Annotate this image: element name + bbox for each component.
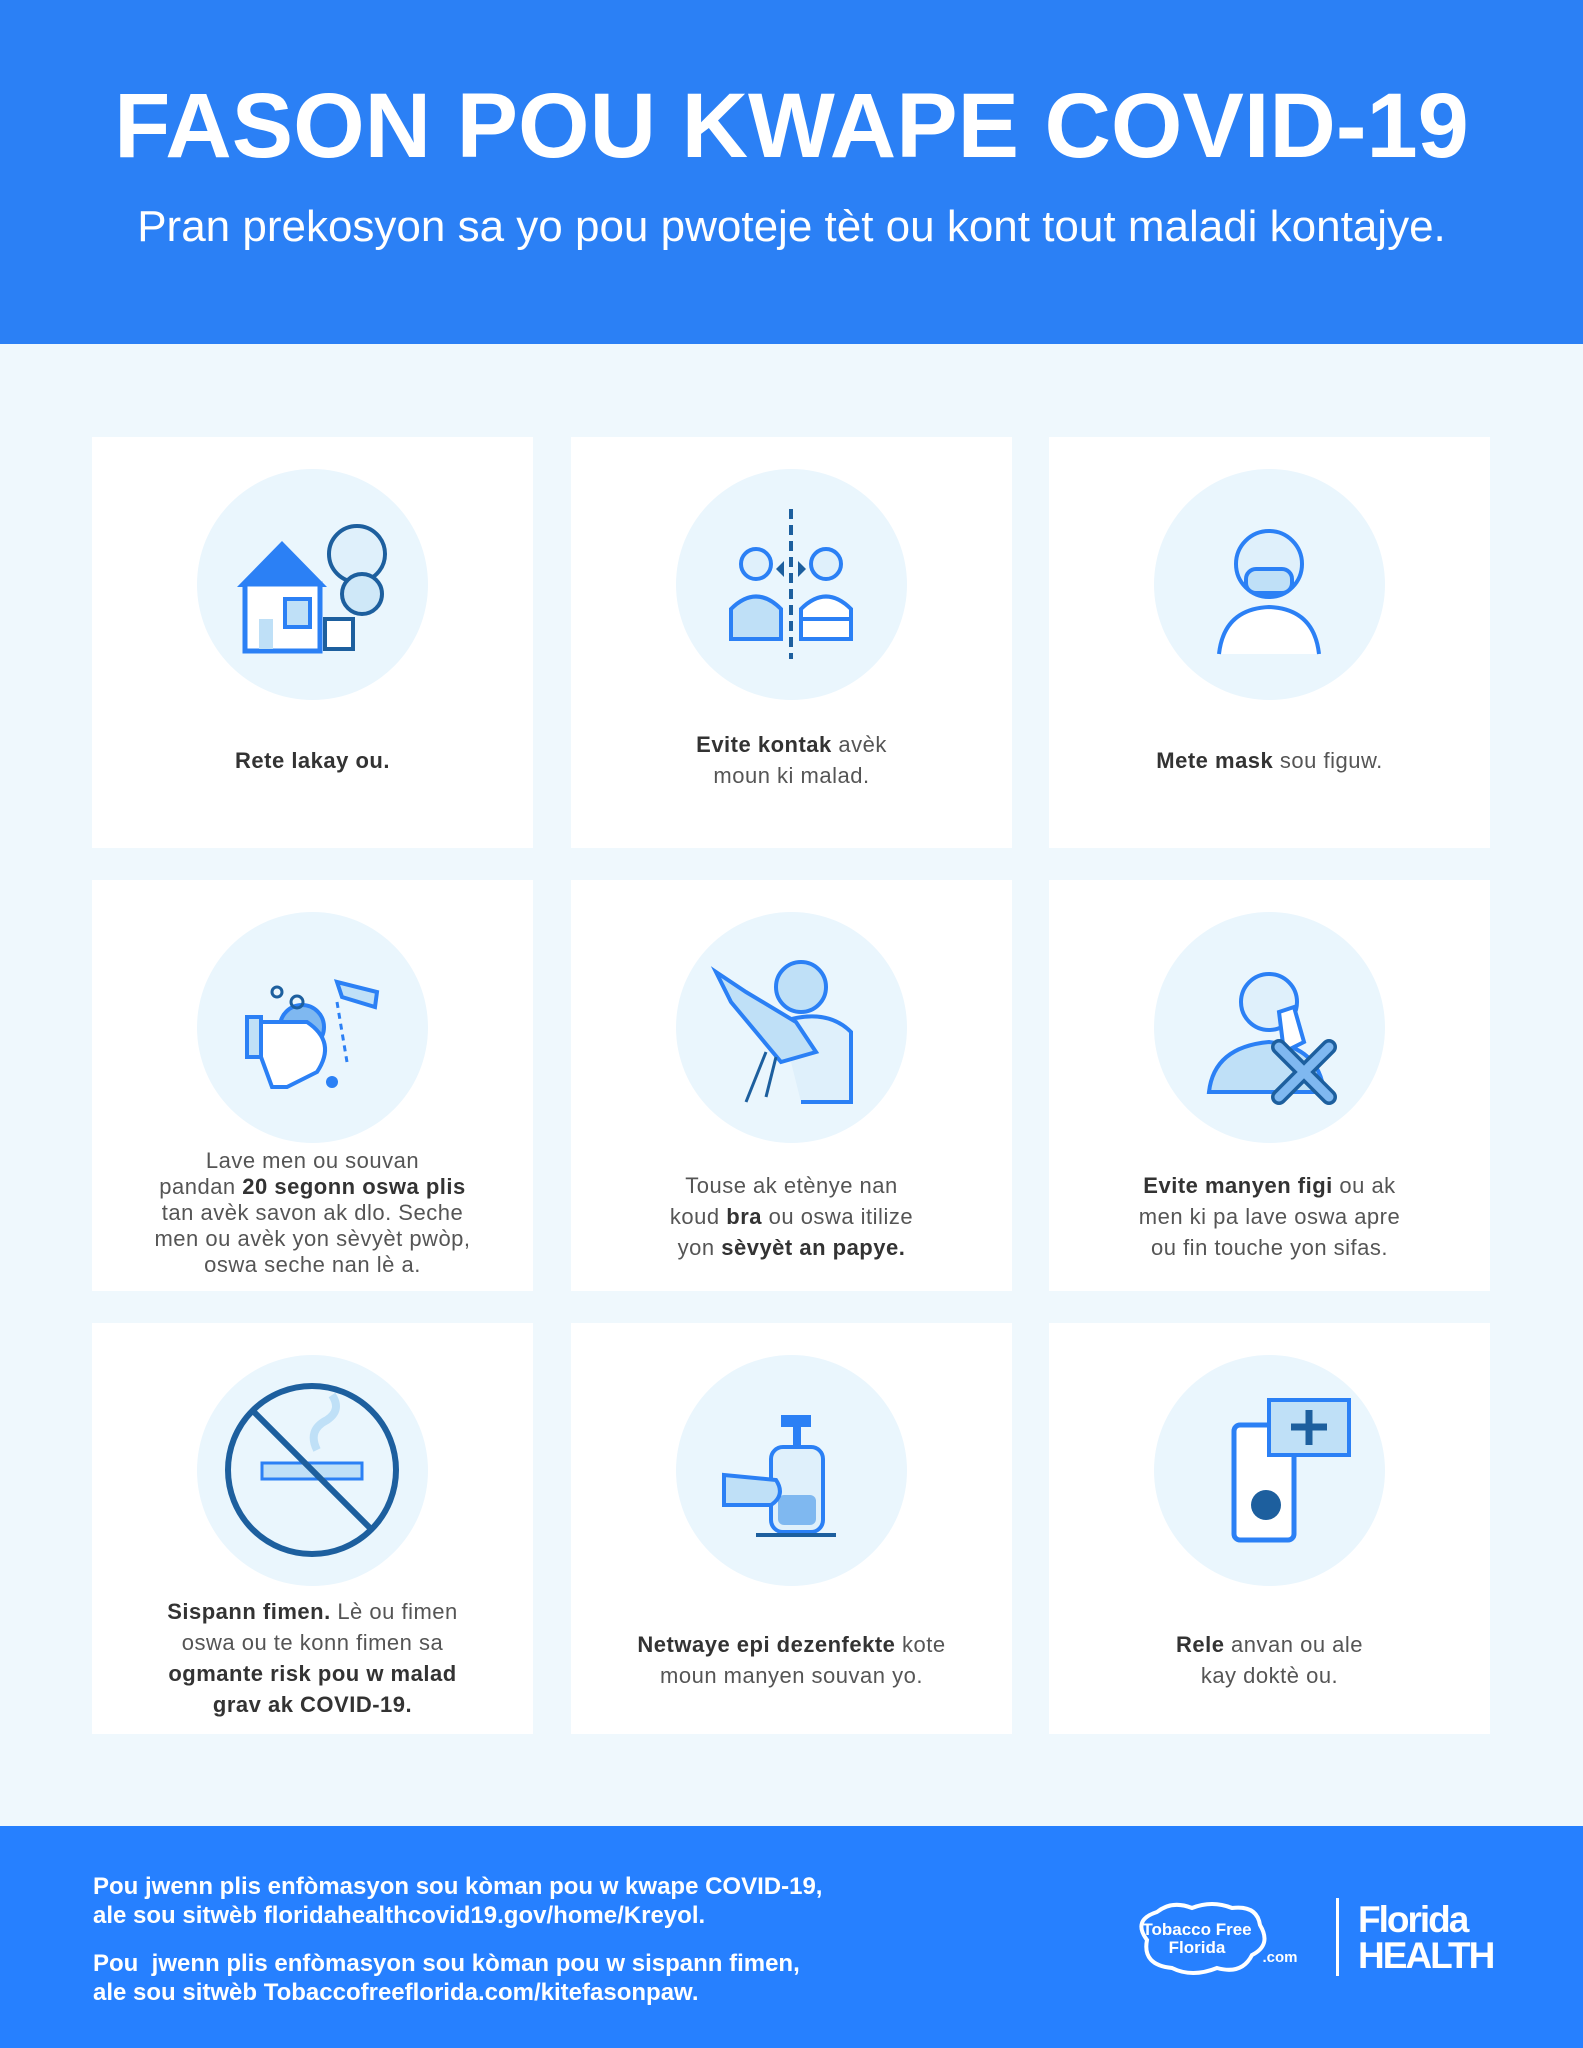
title: FASON POU KWAPE COVID-19 (114, 75, 1469, 177)
icon: distancing (676, 469, 907, 700)
footer (0, 1826, 1583, 2048)
text: tan avèk savon ak dlo. Seche (162, 1200, 463, 1225)
icon: hand washing (197, 912, 428, 1143)
text (154, 1148, 471, 1277)
footer text: covid info: Pou jwenn plis enfòmasyon sou kòman pou w kwape COVID-19, (93, 1873, 822, 1900)
panel: disinfect (571, 1323, 1012, 1734)
footer text: smoking info (93, 1950, 800, 2006)
text: Rele anvan ou ale (1176, 1632, 1363, 1657)
text (1139, 1173, 1400, 1260)
text (637, 1632, 946, 1688)
icon: masked person (1154, 469, 1385, 700)
text: Sispann fimen. Lè ou fimen (167, 1599, 458, 1624)
logo: Florida Health: HEALTH (1358, 1935, 1493, 1976)
footer text: smoking info: Pou jwenn plis enfòmasyon sou kòman pou w sispann fimen, (93, 1950, 800, 1977)
header (0, 0, 1583, 344)
panel: stay home (92, 437, 533, 848)
footer text: covid info: ale sou sitwèb floridahealthcovid19.gov/home/Kreyol. (93, 1902, 705, 1929)
text: Evite manyen figi ou ak (1143, 1173, 1396, 1198)
footer text: covid info (93, 1873, 822, 1929)
icon: cough into elbow (676, 912, 907, 1143)
text: ogmante risk pou w malad (168, 1661, 457, 1686)
logo: Tobacco Free Florida: Florida (1169, 1938, 1226, 1957)
text (167, 1599, 458, 1717)
panel: quit smoking (92, 1323, 533, 1734)
text (670, 1173, 913, 1260)
icon: face touch with X (1154, 912, 1385, 1143)
text: moun ki malad. (713, 763, 870, 788)
text: moun manyen souvan yo. (660, 1663, 923, 1688)
panel: don't touch face (1049, 880, 1490, 1291)
text: koud bra ou oswa itilize (670, 1204, 913, 1229)
text: Touse ak etènye nan (685, 1173, 898, 1198)
icon: sanitizer (676, 1355, 907, 1586)
text: yon sèvyèt an papye. (678, 1235, 905, 1260)
text: Mete mask sou figuw. (1156, 748, 1383, 773)
logo: Florida Health: Florida (1358, 1899, 1467, 1940)
logo: Florida Health (1358, 1899, 1493, 1976)
text: oswa seche nan lè a. (204, 1252, 421, 1277)
subtitle: Pran prekosyon sa yo pou pwoteje tèt ou kont tout maladi kontajye. (137, 202, 1446, 251)
text: Netwaye epi dezenfekte kote (637, 1632, 946, 1657)
text: ou fin touche yon sifas. (1151, 1235, 1388, 1260)
icon: no smoking (197, 1355, 428, 1586)
panel: mask (1049, 437, 1490, 848)
logo: Tobacco Free Florida (1139, 1902, 1298, 1975)
text (696, 732, 887, 788)
text: Rete lakay ou. (235, 748, 390, 773)
text: men ou avèk yon sèvyèt pwòp, (154, 1226, 471, 1251)
divider (1336, 1898, 1339, 1976)
logo: Tobacco Free Florida: Tobacco Free (1142, 1920, 1252, 1939)
text: oswa ou te konn fimen sa (182, 1630, 443, 1655)
logo: Tobacco Free Florida: .com (1262, 1949, 1298, 1966)
icon: house (197, 469, 428, 700)
icon: phone with medical chat (1154, 1355, 1385, 1586)
footer text: smoking info: ale sou sitwèb Tobaccofreeflorida.com/kitefasonpaw. (93, 1979, 698, 2006)
text: Lave men ou souvan (206, 1148, 419, 1173)
text: grav ak COVID-19. (213, 1692, 412, 1717)
panel: wash hands (92, 880, 533, 1291)
panel: call doctor (1049, 1323, 1490, 1734)
text: Evite kontak avèk (696, 732, 887, 757)
panel: cough (571, 880, 1012, 1291)
text: pandan 20 segonn oswa plis (159, 1174, 466, 1199)
panel: avoid contact (571, 437, 1012, 848)
text: men ki pa lave oswa apre (1139, 1204, 1400, 1229)
text: kay doktè ou. (1201, 1663, 1338, 1688)
text (1176, 1632, 1363, 1688)
